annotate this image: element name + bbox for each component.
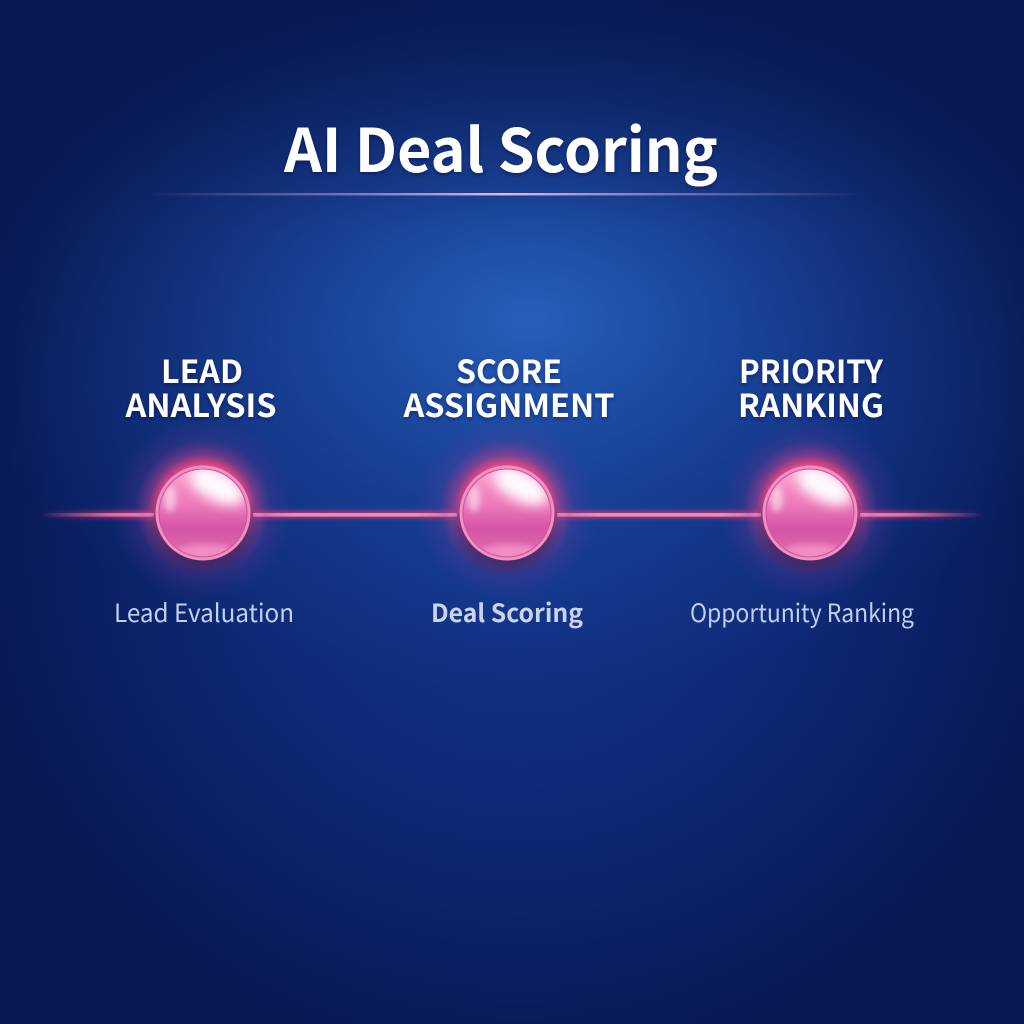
title underline	[150, 193, 860, 195]
heading: lead analysis: ANALYSIS	[124, 381, 277, 427]
heading: priority ranking	[738, 347, 884, 427]
node 2	[415, 417, 599, 601]
caption: deal scoring: Deal Scoring	[431, 594, 583, 630]
step 1: lead analysis	[111, 347, 295, 630]
step 2: score assignment	[402, 347, 614, 630]
step 3: priority ranking	[690, 347, 914, 630]
caption: opportunity ranking: Opportunity Ranking	[690, 594, 914, 630]
node 3	[718, 417, 902, 601]
heading: priority ranking: PRIORITY	[739, 347, 883, 393]
heading: lead analysis: LEAD	[161, 347, 243, 393]
heading: lead analysis	[124, 347, 277, 427]
caption: lead evaluation: Lead Evaluation	[114, 594, 294, 630]
node 1	[111, 417, 295, 601]
heading: score assignment	[402, 347, 614, 427]
connector line	[40, 511, 985, 518]
heading: score assignment: SCORE	[456, 347, 562, 393]
heading: score assignment: ASSIGNMENT	[402, 381, 614, 427]
heading: priority ranking: RANKING	[738, 381, 884, 427]
title: AI Deal Scoring	[283, 103, 718, 190]
